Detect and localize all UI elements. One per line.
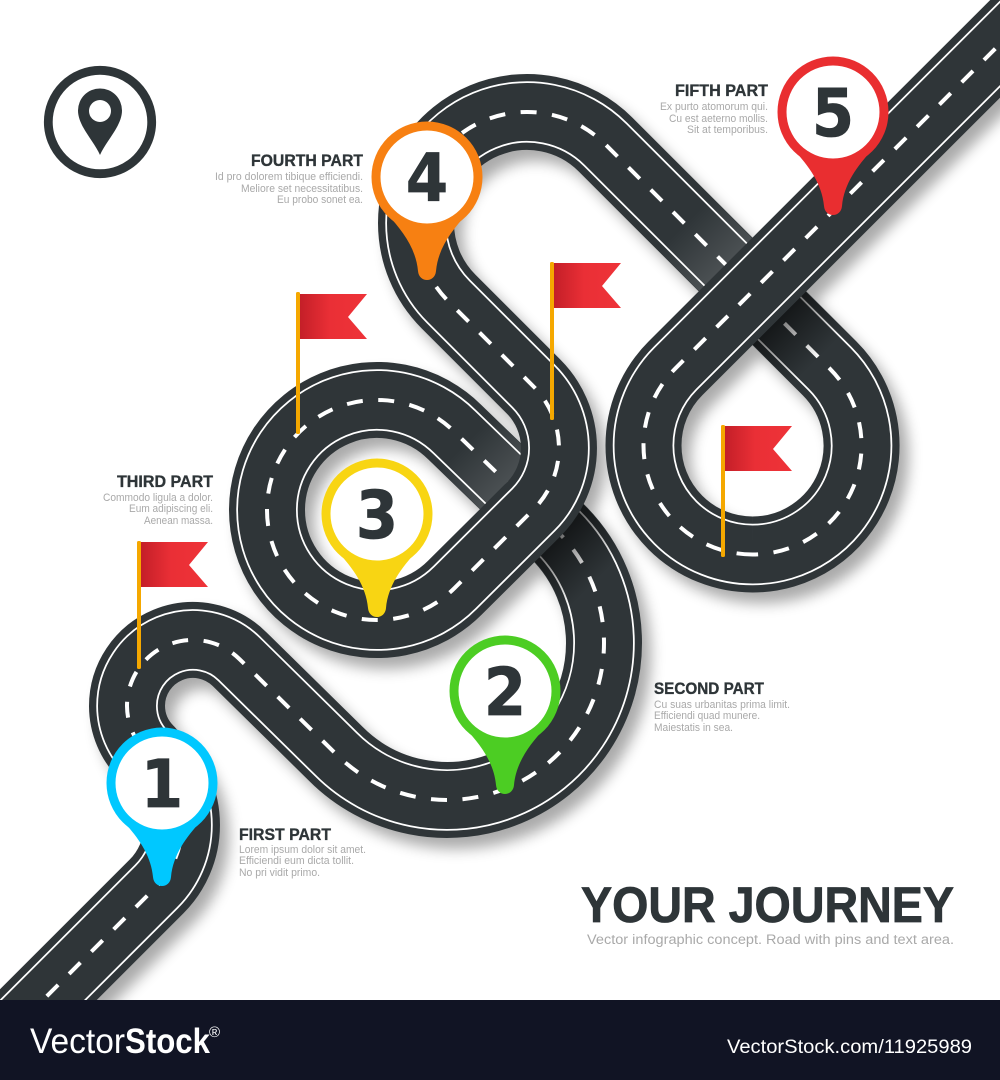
road: start through second part into third loop: [0, 400, 604, 1063]
pin 2: 2: [484, 654, 526, 731]
flag 1: [137, 541, 208, 669]
text: third part: Aenean massa.: [144, 515, 213, 527]
pin 4: 4: [406, 140, 448, 217]
text: fifth part: Cu est aeterno mollis.: [669, 113, 768, 125]
text: fourth part: [215, 152, 363, 206]
text: third part: Commodo ligula a dolor.: [103, 492, 213, 504]
text: third part: THIRD PART: [117, 473, 213, 491]
text: first part: No pri vidit primo.: [239, 867, 320, 879]
text: second part: SECOND PART: [654, 680, 764, 698]
text: third part: Eum adipiscing eli.: [129, 503, 213, 515]
text: fourth part: Id pro dolorem tibique efficiendi.: [215, 171, 363, 183]
crossing shading: lower road at first overpass: [455, 432, 604, 643]
road: right loop to top right exit: [643, 0, 1000, 554]
text: fifth part: FIFTH PART: [675, 82, 768, 100]
footer logo: [30, 1022, 220, 1061]
text: fourth part: Meliore set necessitatibus.: [241, 183, 363, 195]
pin 2: [450, 636, 560, 794]
text: fifth part: [660, 82, 768, 136]
text: first part: Efficiendi eum dicta tollit.: [239, 855, 354, 867]
subtitle: Vector infographic concept. Road with pins and text area.: [587, 932, 954, 947]
icon: location pin in circle: [48, 70, 152, 174]
flag 2: [296, 292, 367, 434]
text: first part: [239, 826, 366, 879]
footer image id: VectorStock.com/11925989: [727, 1037, 972, 1058]
crossing shading: lower road at second overpass: [680, 219, 830, 368]
footer logo: ®: [209, 1024, 220, 1041]
title: YOUR JOURNEY: [581, 877, 954, 933]
footer logo: Stock: [125, 1022, 210, 1061]
footer logo: Vector: [30, 1022, 125, 1061]
pin 5: 5: [812, 75, 854, 152]
text: second part: [654, 680, 790, 734]
flag 3: [550, 262, 621, 420]
text: fourth part: FOURTH PART: [251, 152, 363, 170]
text: second part: Maiestatis in sea.: [654, 722, 733, 734]
text: fifth part: Ex purto atomorum qui.: [660, 101, 768, 113]
pin 1: [106, 728, 218, 886]
pin 3: [322, 458, 432, 617]
pin 3: 3: [356, 477, 398, 554]
pin 1: 1: [141, 746, 183, 823]
text: second part: Efficiendi quad munere.: [654, 710, 760, 722]
road: third loop, S bend, top loop, right loop: [267, 112, 862, 620]
text: fifth part: Sit at temporibus.: [687, 124, 768, 136]
text: fourth part: Eu probo sonet ea.: [277, 194, 363, 206]
text: first part: FIRST PART: [239, 826, 331, 844]
text: first part: Lorem ipsum dolor sit amet.: [239, 844, 366, 856]
pin 4: [372, 122, 482, 280]
pin 5: [778, 56, 888, 215]
text: third part: [103, 473, 213, 527]
flag 4: [721, 425, 792, 557]
text: second part: Cu suas urbanitas prima limit.: [654, 699, 790, 711]
footer bar: [0, 1000, 1000, 1080]
